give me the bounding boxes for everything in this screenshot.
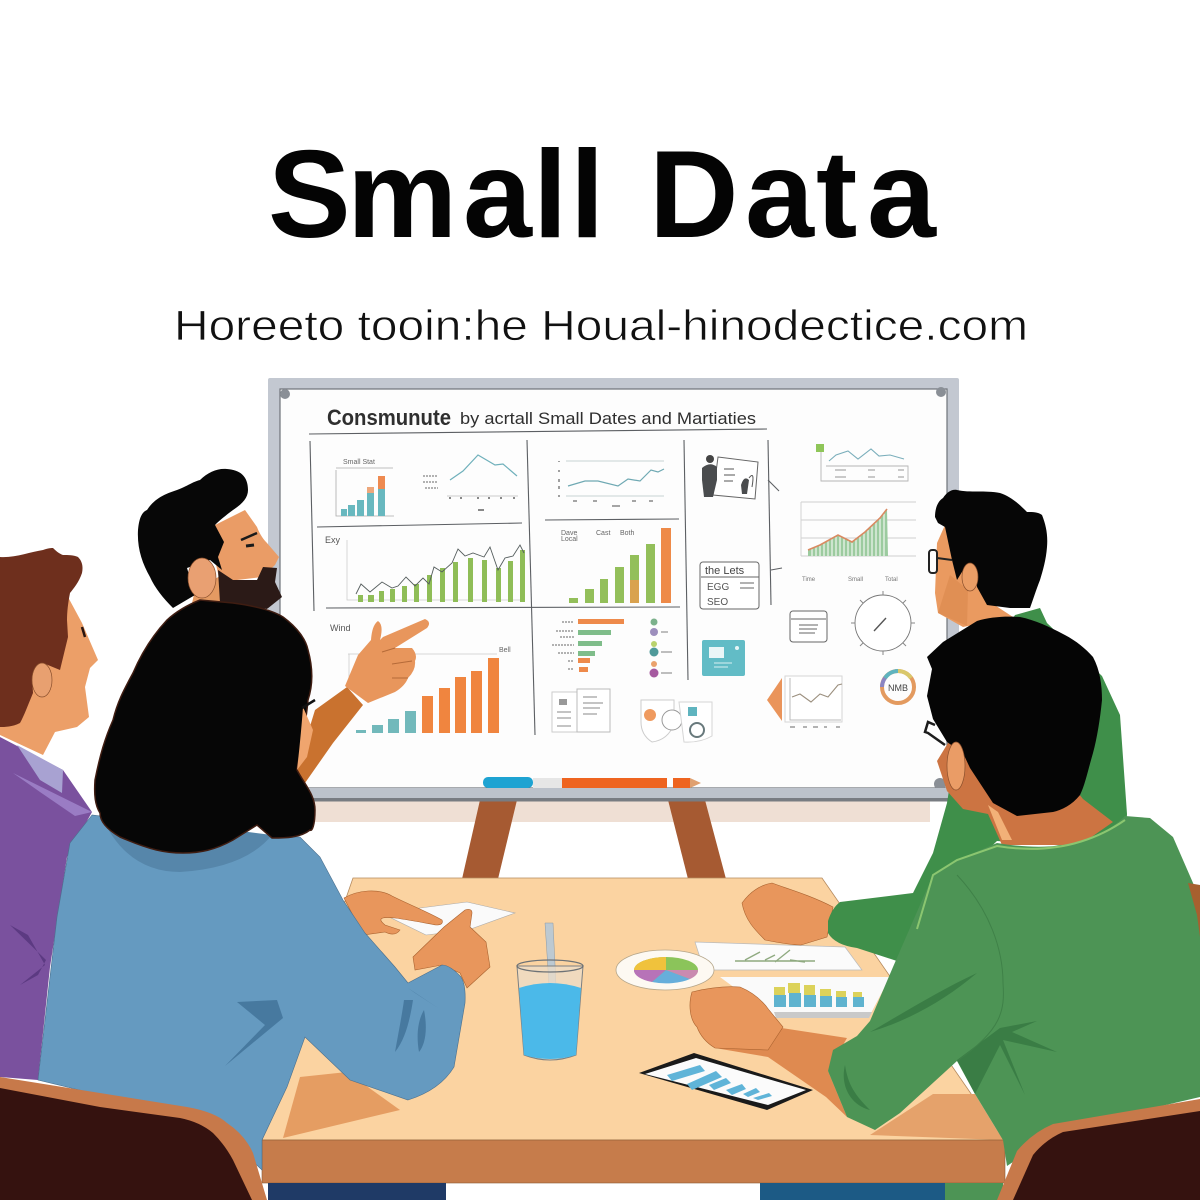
face: [215, 510, 279, 582]
shirt: [0, 737, 92, 1080]
small legend icons: [650, 618, 672, 678]
chart: rising green and orange bars: [561, 528, 671, 603]
table documents: [616, 942, 890, 1018]
ear: [188, 558, 216, 598]
sketch table box: the Lets: [705, 565, 745, 577]
sleeve shadow: [844, 973, 1057, 1110]
hair: [935, 490, 1047, 608]
board tray: [305, 788, 950, 802]
icon: presenter at board: [702, 455, 758, 499]
shirt folds: [10, 925, 46, 985]
chart: small stacked bars: [336, 459, 394, 516]
chart: teal and orange bars: Wind: [330, 623, 351, 633]
area chart: Small: [848, 577, 863, 583]
neck: [190, 575, 222, 612]
sweater: [38, 815, 465, 1170]
subtitle: Horeeto tooin:he Houal-hinodectice.com: [174, 302, 1028, 350]
hair: [927, 617, 1102, 816]
pie chart plate: [616, 950, 714, 990]
neckline shade: [100, 810, 272, 872]
ear: [947, 742, 965, 790]
person: man in purple shirt: [0, 548, 98, 1080]
chart: teal and orange bars: [330, 623, 511, 733]
chart: teal and orange bars: Bell: [499, 647, 511, 654]
badge icon cluster: [641, 700, 712, 742]
hand on table: [742, 883, 833, 945]
sweater folds: [225, 988, 438, 1066]
chart: teal line one: [423, 455, 518, 510]
chart: rising green and orange bars: Both: [620, 530, 635, 537]
board frame: [268, 378, 959, 801]
glasses: [929, 550, 952, 573]
hair: [0, 548, 83, 727]
face sliver: [297, 707, 313, 770]
gauge dial: [851, 591, 915, 655]
board surface: [280, 389, 947, 788]
face: [0, 597, 98, 755]
stacked bars paper: [720, 977, 890, 1018]
eye and brow: [241, 533, 257, 546]
area chart: Time: [802, 577, 816, 583]
line chart paper: [695, 942, 862, 970]
hands and paper: [344, 891, 515, 988]
chart: small stacked bars: Small Stat: [343, 459, 375, 466]
straw: [545, 923, 556, 985]
sketch table box: EGG: [707, 582, 729, 593]
table: [262, 878, 1005, 1200]
paper: [381, 902, 515, 935]
face: [935, 525, 1013, 627]
sketch table box: SEO: [707, 597, 728, 608]
pointing arm: [296, 687, 363, 783]
tablet: [639, 1053, 813, 1110]
water: [519, 983, 581, 1059]
table front edge: [262, 1140, 1005, 1183]
screen bars: [667, 1065, 772, 1100]
chart: rising green and orange bars: Local: [561, 536, 578, 543]
chart: rising green and orange bars: Dave: [561, 530, 577, 537]
chart: green bars with line: [325, 535, 525, 602]
left hand: [344, 891, 442, 935]
forearm: [715, 1027, 847, 1117]
board heading: Consmunute: [327, 405, 451, 430]
neck highlight: [988, 805, 1012, 840]
person: man at back right: [742, 490, 1127, 962]
title: Small Data: [268, 126, 937, 264]
collar and shoulder trim: [917, 820, 1125, 929]
whiteboard: [268, 378, 959, 879]
table top: [262, 878, 1003, 1140]
chart: rising green and orange bars: Cast: [596, 530, 610, 537]
table shadow left: [283, 1072, 400, 1138]
sleeve seam: [957, 875, 1003, 1061]
board shadow: [305, 801, 930, 822]
hand: [690, 987, 783, 1050]
frame corner screws: [280, 387, 946, 790]
chart: teal line two: [559, 461, 664, 506]
brow: [82, 627, 85, 637]
document icons: [552, 689, 610, 732]
marker pen: [483, 777, 701, 788]
person: woman in blue sweater: [38, 600, 515, 1170]
ring chart: NMB: [888, 683, 908, 693]
chair: right: [997, 883, 1200, 1200]
area chart: [801, 502, 916, 583]
right hand: [413, 909, 490, 988]
legs under table: [268, 1183, 1003, 1200]
board heading: by acrtall Small Dates and Martiaties: [460, 410, 756, 428]
hair: [138, 469, 248, 608]
line chart with orange marker: [767, 676, 842, 727]
area chart: Total: [885, 577, 898, 583]
chart: horizontal bars: [552, 619, 624, 672]
chair back sliver: [1188, 883, 1200, 937]
finger creases: [382, 648, 412, 678]
person: pointing man: [138, 469, 429, 783]
green shirt: [828, 608, 1127, 962]
sketch table box: [700, 562, 759, 609]
easel legs: [462, 800, 726, 879]
collar: [17, 745, 63, 793]
ear: [962, 563, 978, 591]
ring chart: [882, 671, 914, 703]
person: man in front right: [690, 617, 1200, 1166]
small document icon: [790, 611, 827, 642]
glass body: [517, 966, 583, 1060]
green sweater: [828, 816, 1200, 1166]
jaw shadow: [938, 575, 968, 626]
hair: [95, 600, 315, 853]
table shadow right: [870, 1094, 1003, 1140]
ear: [32, 663, 52, 697]
glass rim: [517, 960, 583, 972]
board dividers: [309, 429, 782, 735]
neck: [937, 720, 1113, 845]
glasses arm: [302, 700, 315, 708]
chart: green bars with line: Exy: [325, 535, 341, 545]
teal card icon: [702, 640, 745, 676]
pointing hand: [345, 619, 429, 703]
small top line chart: [816, 444, 908, 481]
beard: [218, 567, 282, 609]
screen: [645, 1058, 806, 1105]
glasses: [925, 722, 945, 745]
glass of water: [517, 923, 583, 1060]
chair: left: [0, 1077, 267, 1200]
board heading: [327, 405, 756, 430]
shirt highlight: [13, 773, 92, 816]
